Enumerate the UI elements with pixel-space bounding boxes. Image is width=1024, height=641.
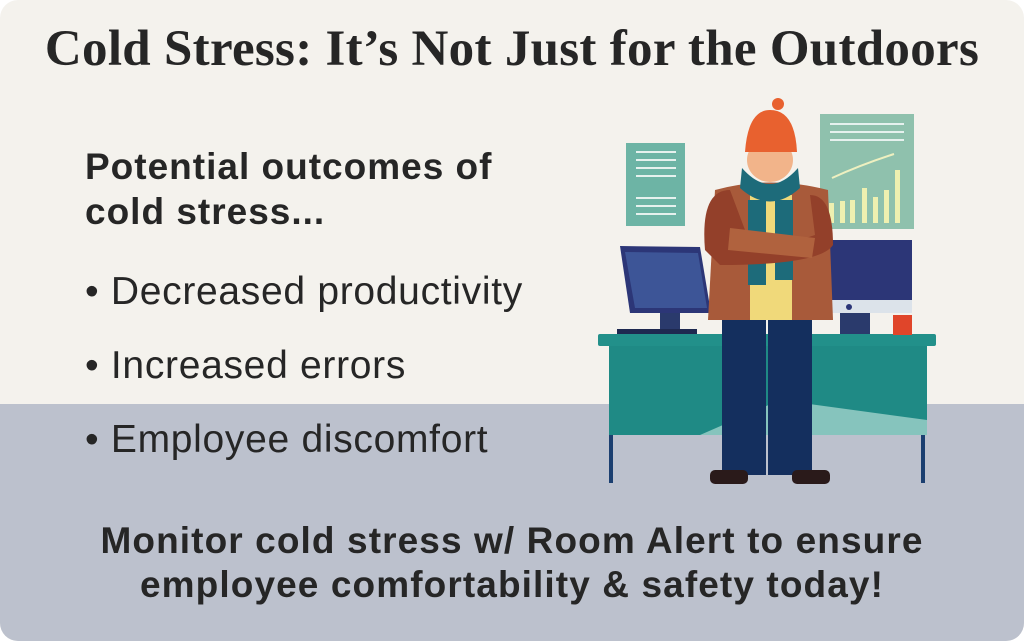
- desk: [598, 334, 936, 483]
- subheading: cold stress...: [85, 191, 325, 232]
- bullet list: • Employee discomfort: [85, 418, 488, 461]
- bullet list: • Decreased productivity: [85, 270, 523, 313]
- left monitor: [617, 246, 711, 334]
- poster right chart: [820, 114, 914, 229]
- subheading: Potential outcomes of: [85, 146, 492, 187]
- bullet list: • Increased errors: [85, 344, 406, 387]
- right monitor: [816, 240, 912, 335]
- subheading: [85, 146, 492, 232]
- footer call to action: Monitor cold stress w/ Room Alert to ensure: [100, 520, 924, 561]
- footer call to action: [100, 520, 924, 605]
- person: [704, 98, 833, 484]
- poster left: [626, 143, 685, 226]
- title: Cold Stress: It’s Not Just for the Outdoors: [45, 21, 979, 77]
- bullet list: [85, 270, 523, 461]
- footer call to action: employee comfortability & safety today!: [140, 564, 884, 605]
